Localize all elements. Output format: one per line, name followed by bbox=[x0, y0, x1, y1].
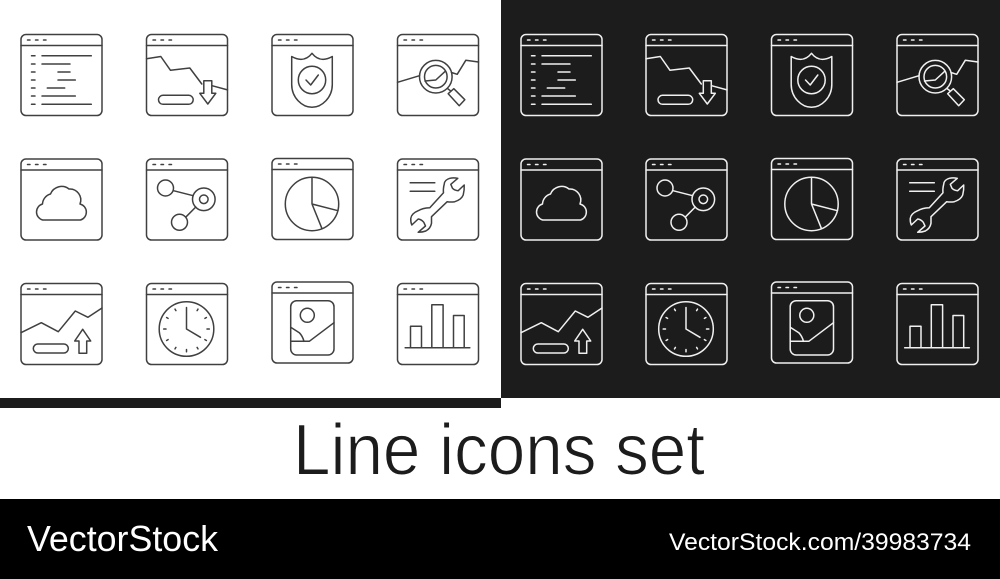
panel: dark icon set bbox=[521, 34, 978, 364]
icon: code window bbox=[21, 34, 102, 116]
icon: shield window inverted bbox=[772, 34, 852, 116]
title: Line icons set bbox=[293, 410, 705, 490]
footer image id: VectorStock.com/39983734 bbox=[669, 529, 971, 556]
icon: code window inverted bbox=[521, 34, 602, 116]
icon: falling chart window bbox=[146, 34, 228, 116]
icon: bar chart window bbox=[398, 284, 478, 364]
footer bar bbox=[0, 499, 1000, 579]
icon: magnifier chart window bbox=[398, 34, 478, 116]
icon: wrench window inverted bbox=[897, 159, 978, 240]
icon: rising chart window bbox=[21, 284, 102, 364]
icon: shield window bbox=[272, 34, 353, 116]
icon: pie chart window bbox=[272, 158, 353, 240]
icon: clock window inverted bbox=[646, 284, 727, 364]
icon: share window inverted bbox=[646, 159, 727, 240]
icon: bar chart window inverted bbox=[897, 284, 978, 364]
icon: magnifier chart window inverted bbox=[897, 34, 978, 116]
footer brand: VectorStock bbox=[27, 518, 219, 559]
icon: falling chart window inverted bbox=[646, 34, 727, 116]
icon: wrench window bbox=[398, 159, 478, 240]
icon: pie chart window inverted bbox=[772, 158, 852, 240]
icon: clock window bbox=[146, 284, 228, 364]
icon: share window bbox=[146, 159, 228, 240]
panel: dark background bbox=[501, 0, 1000, 398]
icon: image window bbox=[272, 282, 353, 363]
panel: light icon set bbox=[21, 34, 478, 364]
icon: rising chart window inverted bbox=[521, 284, 602, 364]
icon: cloud window bbox=[21, 159, 102, 240]
icon: cloud window inverted bbox=[521, 159, 602, 240]
left panel bottom bar bbox=[0, 398, 501, 408]
icon: image window inverted bbox=[772, 282, 852, 363]
